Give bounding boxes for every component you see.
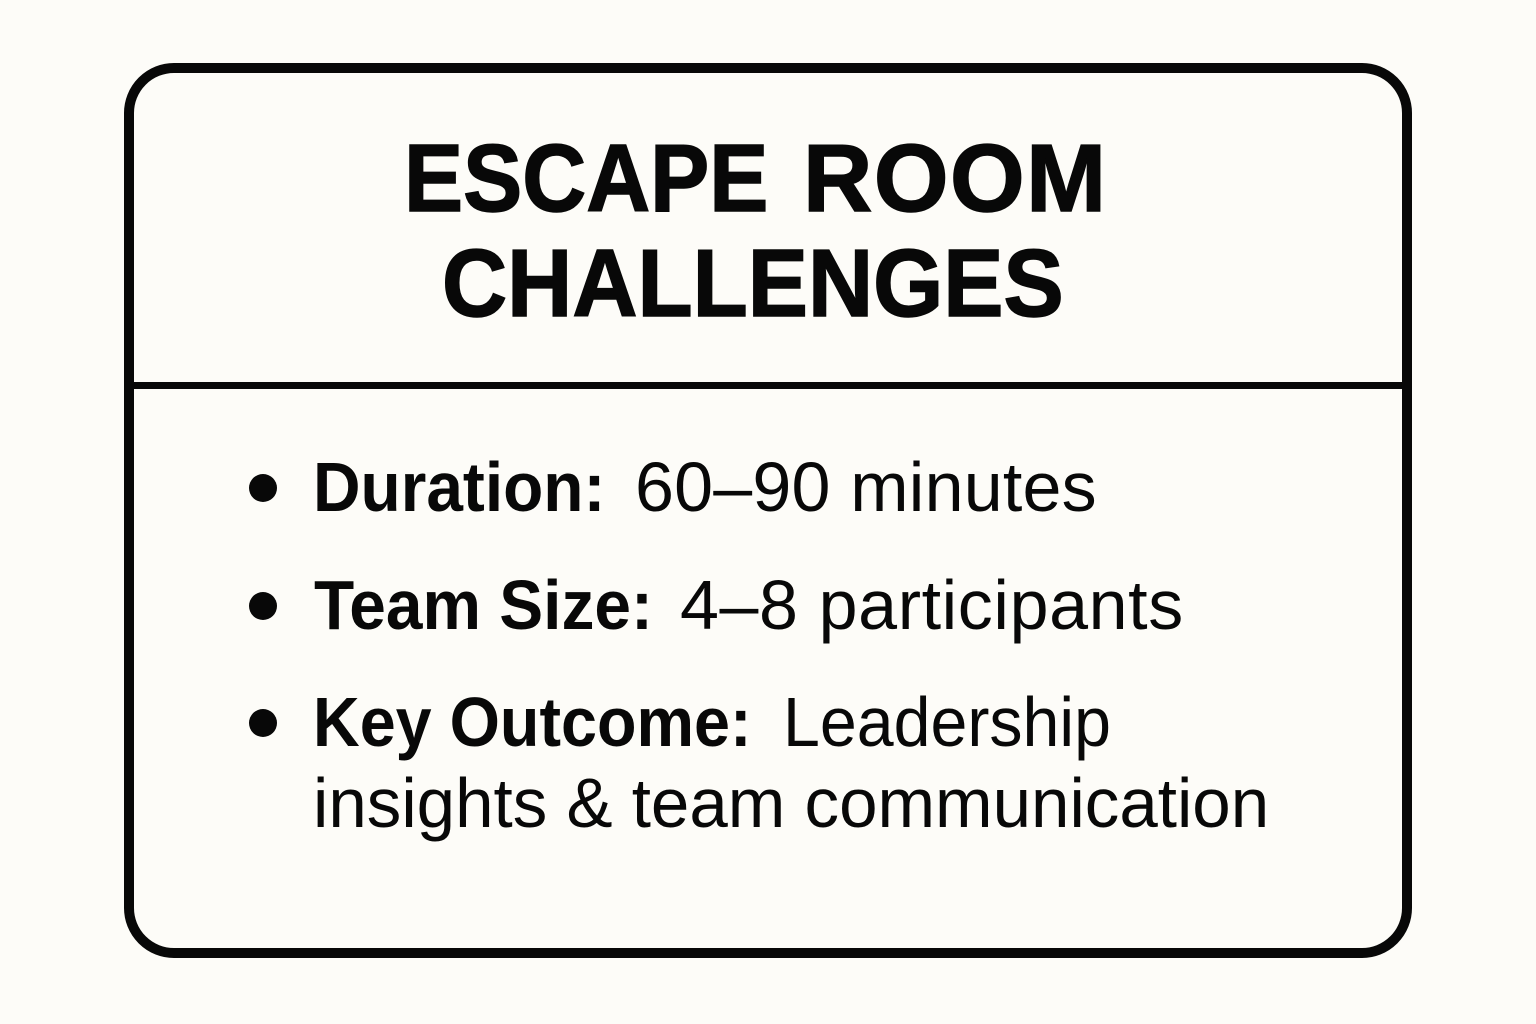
- bullet: team size: Team Size:: [314, 566, 653, 644]
- bullet: duration: [249, 448, 1097, 526]
- bullet: team size: [249, 566, 1184, 644]
- divider line: [130, 382, 1406, 389]
- title line 2: CHALLENGES: [442, 230, 1064, 337]
- bullet: duration: 60–90 minutes: [635, 448, 1097, 526]
- title: [404, 125, 1108, 337]
- title line 1: ROOM: [803, 125, 1108, 232]
- panel: card: [124, 63, 1412, 958]
- title line 1: ESCAPE: [404, 125, 768, 232]
- title line 1: [404, 125, 1108, 232]
- bullet: key outcome: [249, 683, 1269, 842]
- bullet: key outcome: Key Outcome:: [313, 683, 751, 761]
- bullet: team size: 4–8 participants: [680, 566, 1184, 644]
- bullet: key outcome: Leadership: [783, 683, 1111, 761]
- bullet list: [249, 448, 1269, 842]
- bullet: duration: Duration:: [313, 448, 605, 526]
- bullet: key outcome: insights & team communication: [313, 764, 1269, 842]
